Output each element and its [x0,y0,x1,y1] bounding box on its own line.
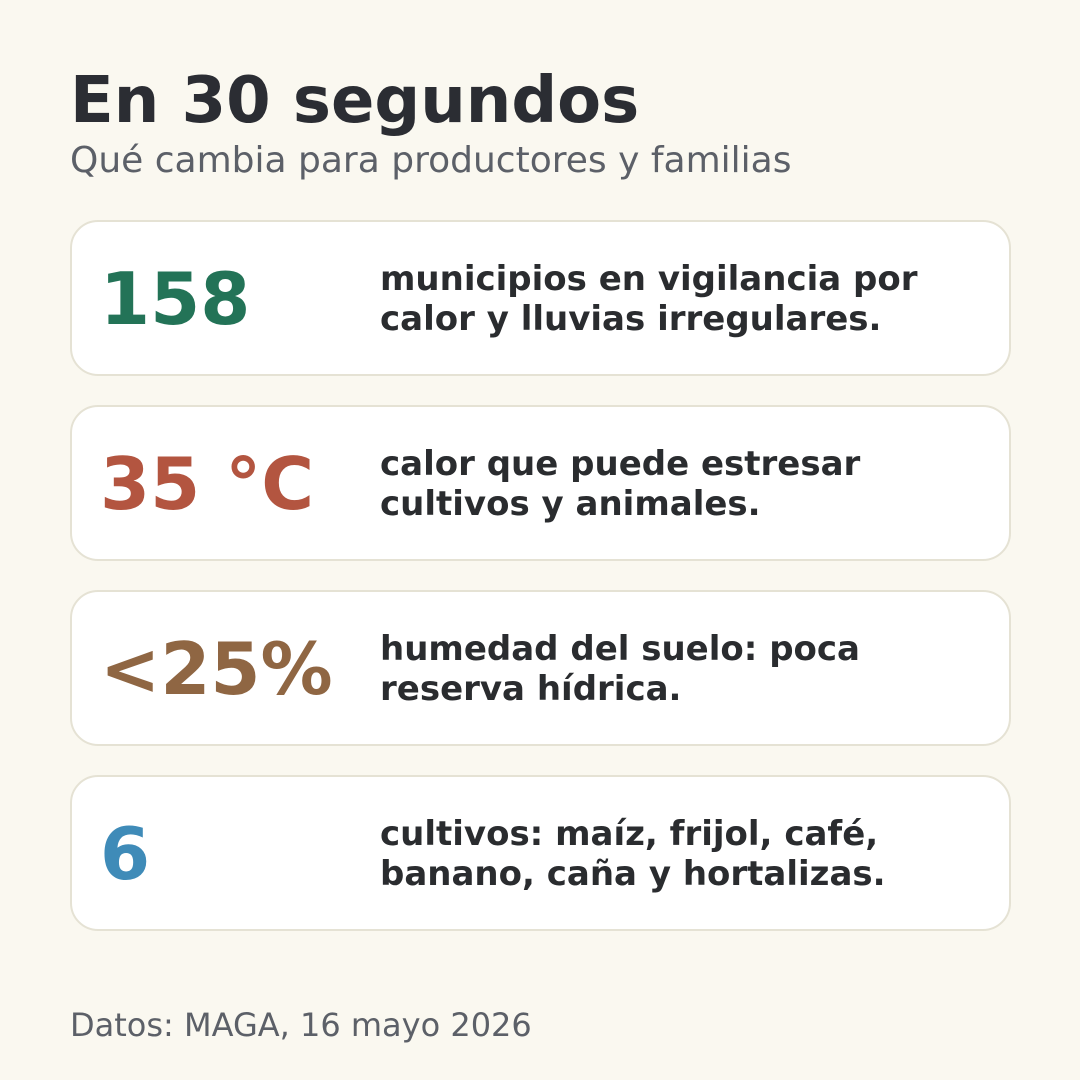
text: municipios: municipios en vigilancia por [380,259,918,299]
stat: 35 °C: 35 °C [100,442,314,526]
text: humedad: humedad del suelo: poca [380,629,860,669]
text: municipios [380,259,918,339]
text: cultivos: banano, caña y hortalizas. [380,854,886,894]
text: humedad: reserva hídrica. [380,669,681,709]
panel: 158 municipios [70,220,1011,376]
stat: 6: 6 [100,812,150,896]
text: cultivos: cultivos: maíz, frijol, café, [380,814,878,854]
text: calor [380,444,860,524]
stat: 158: 158 [100,257,250,341]
text: municipios: calor y lluvias irregulares. [380,299,881,339]
text: calor: cultivos y animales. [380,484,761,524]
stat: <25%: <25% [100,627,333,711]
panel: cultivos [70,775,1011,931]
title: En 30 segundos [70,64,639,138]
text: cultivos [380,814,886,894]
text: calor: calor que puede estresar [380,444,860,484]
subtitle: Qué cambia para productores y familias [70,140,791,181]
text: humedad [380,629,860,709]
panel: humedad [70,590,1011,746]
panel: 35 °C [70,405,1011,561]
footer source: Datos: MAGA, 16 mayo 2026 [70,1006,532,1044]
